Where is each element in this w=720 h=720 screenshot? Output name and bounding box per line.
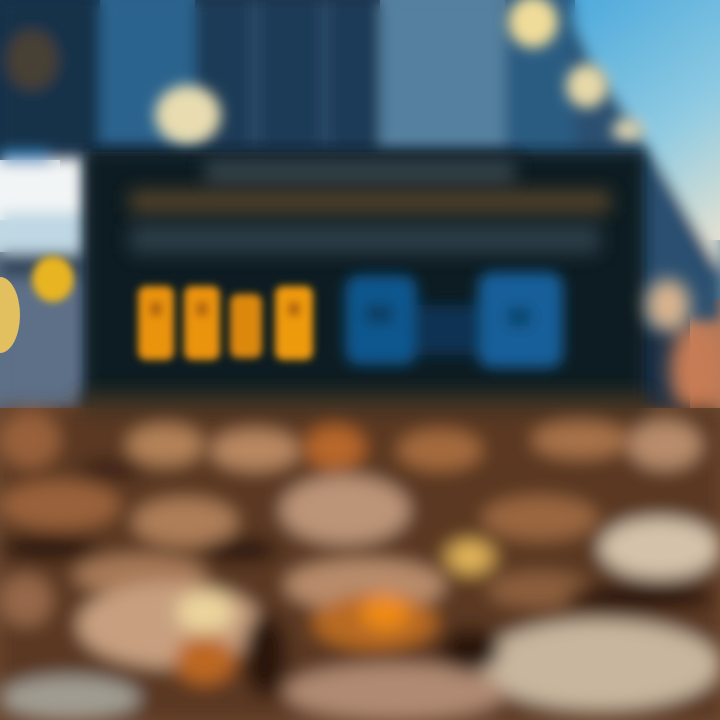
coin: top right <box>508 0 558 48</box>
blue digits <box>345 272 563 368</box>
coin: far left <box>0 277 20 353</box>
coin: small right <box>612 118 644 142</box>
text block: blurred amber line <box>130 190 610 214</box>
coin pile foreground <box>0 392 720 720</box>
text block: blurred grey lines <box>130 224 600 254</box>
coin: upper centre <box>155 85 221 145</box>
right side warm glow <box>646 279 720 415</box>
orange digits <box>138 286 313 360</box>
glowing coins floating <box>0 0 644 353</box>
coin: right <box>566 64 608 108</box>
board lower edge <box>80 392 650 414</box>
background: building and sky <box>0 0 720 440</box>
left window: bright sky and street <box>0 150 88 415</box>
panel: dark display board <box>86 152 644 410</box>
heading: blurred top line <box>205 160 515 184</box>
coin: left yellow <box>32 256 74 302</box>
